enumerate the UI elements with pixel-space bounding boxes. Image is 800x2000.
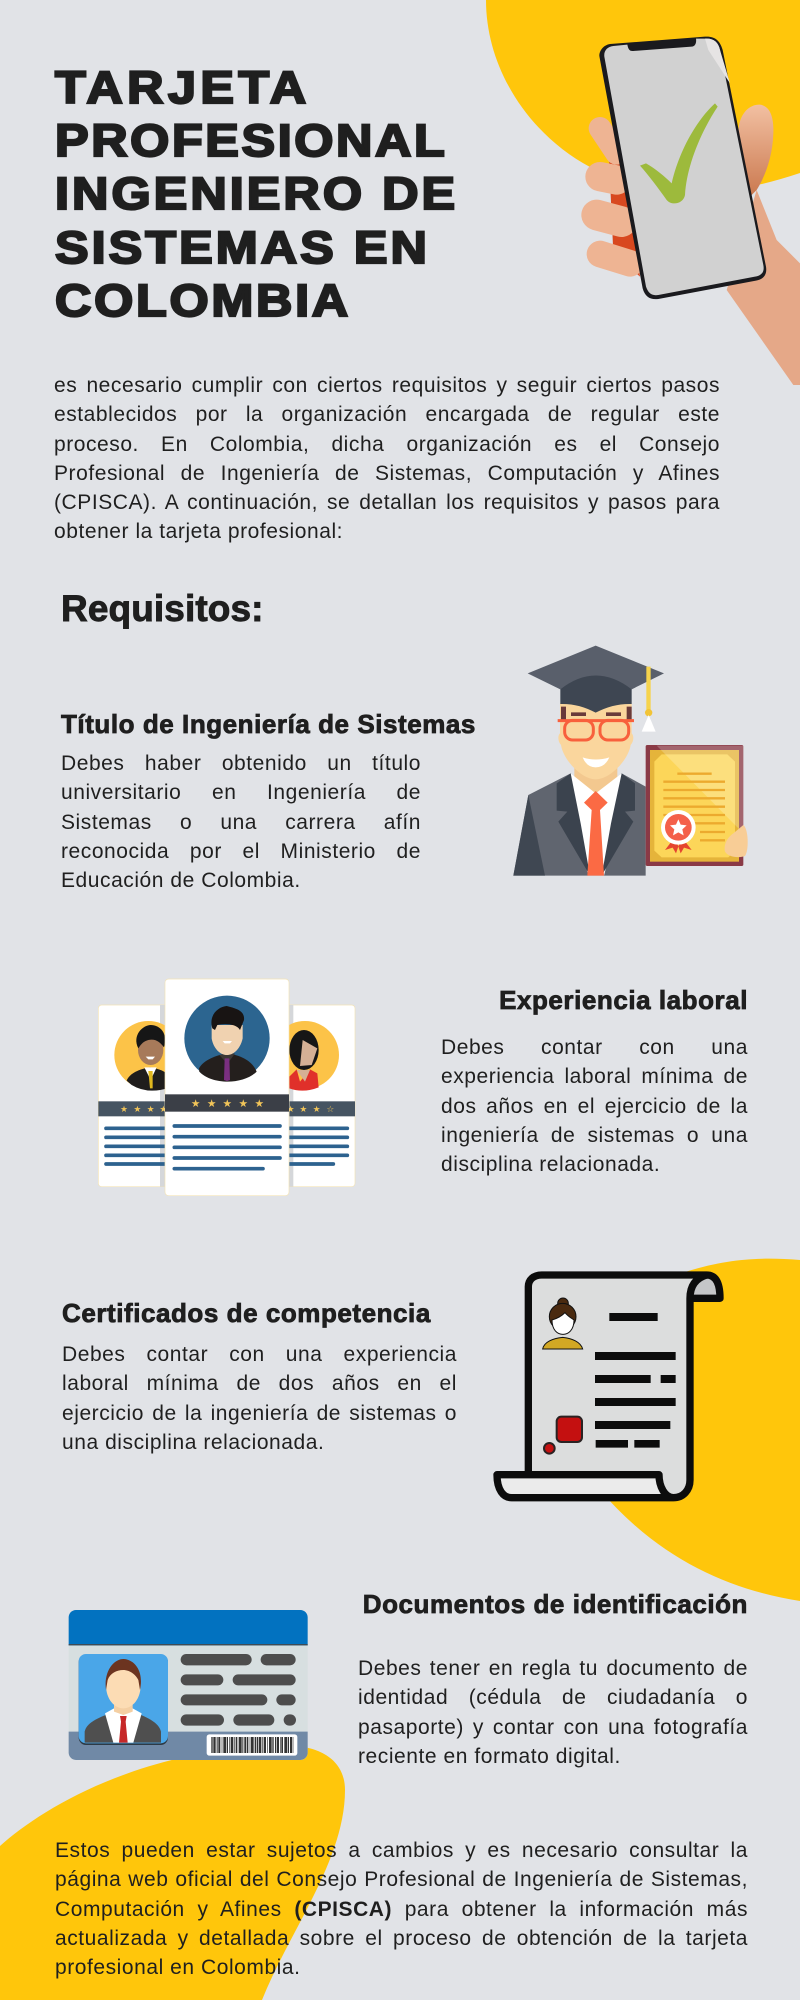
intro paragraph [54, 374, 720, 543]
icon: three profile cards [98, 979, 355, 1196]
text: experiencia laboral: ingeniería de sistemas o una [441, 1124, 748, 1147]
text: título de ingeniería [61, 752, 421, 892]
title: COLOMBIA [55, 275, 351, 326]
closing paragraph: página web oficial del Consejo Profesional de Ingeniería de Sistemas, [55, 1868, 748, 1891]
text: título de ingeniería: Debes haber obtenido un título [61, 752, 421, 775]
heading: título de ingeniería: Título de Ingeniería de Sistemas [61, 709, 476, 739]
icon: identification card [69, 1610, 308, 1760]
closing paragraph: actualizada y detallada sobre el proceso de obtención de la tarjeta [55, 1927, 748, 1950]
blob: middle right [582, 1259, 800, 1601]
text: título de ingeniería: Sistemas o una carrera afín [61, 811, 421, 834]
icon: three profile cards: ★ [287, 1105, 295, 1115]
intro paragraph: proceso. En Colombia, dicha organización es el Consejo [54, 433, 720, 456]
icon: three profile cards: ☆ [326, 1105, 334, 1115]
title: SISTEMAS EN [55, 222, 430, 273]
text: certificados de competencia: ejercicio de la ingeniería de sistemas o [62, 1402, 457, 1425]
icon: hand holding phone with check mark [597, 37, 800, 385]
closing paragraph: Estos pueden estar sujetos a cambios y es necesario consultar la [55, 1839, 748, 1862]
intro paragraph: Profesional de Ingeniería de Sistemas, Computación y Afines [54, 462, 720, 485]
text: experiencia laboral: Debes contar con una [441, 1036, 748, 1059]
text: documentos de identificación: identidad (cédula de ciudadanía o [358, 1686, 748, 1709]
heading: requisitos: Requisitos: [61, 588, 264, 629]
text: título de ingeniería: reconocida por el Ministerio de [61, 840, 421, 863]
text: título de ingeniería: Educación de Colombia. [61, 869, 301, 892]
text: documentos de identificación [358, 1657, 748, 1768]
text: certificados de competencia: laboral mínima de dos años en el [62, 1372, 457, 1395]
title [54, 62, 458, 326]
text: documentos de identificación: reciente en formato digital. [358, 1745, 621, 1768]
text: documentos de identificación: Debes tener en regla tu documento de [358, 1657, 748, 1680]
title: PROFESIONAL [55, 115, 447, 166]
heading: documentos de identificación: Documentos de identificación [363, 1589, 748, 1619]
icon: three profile cards: ★ [159, 1105, 167, 1115]
intro paragraph: es necesario cumplir con ciertos requisitos y seguir ciertos pasos [54, 374, 720, 397]
icon: three profile cards: ★ [147, 1105, 155, 1115]
text: título de ingeniería: universitario en Ingeniería de [61, 781, 421, 804]
icon: three profile cards: ★ [191, 1097, 200, 1110]
text: certificados de competencia [62, 1343, 457, 1454]
icon: three profile cards: ★ [133, 1105, 141, 1115]
icon: three profile cards: ★ [313, 1105, 321, 1115]
icon: graduate holding diploma [513, 646, 748, 876]
closing paragraph: profesional en Colombia. [55, 1956, 301, 1979]
text: experiencia laboral: disciplina relacionada. [441, 1153, 660, 1176]
heading: experiencia laboral: Experiencia laboral [499, 985, 748, 1015]
icon: three profile cards: ★ [239, 1097, 248, 1110]
intro paragraph: obtener la tarjeta profesional: [54, 520, 343, 543]
intro paragraph: (CPISCA). A continuación, se detallan los requisitos y pasos para [54, 491, 720, 514]
icon: three profile cards: ★ [207, 1097, 216, 1110]
title: INGENIERO DE [55, 168, 458, 219]
icon: three profile cards: ★ [299, 1105, 307, 1115]
icon: three profile cards: ★ [223, 1097, 232, 1110]
text: certificados de competencia: una disciplina relacionada. [62, 1431, 324, 1454]
closing paragraph: Computación y Afines (CPISCA) para obtener la información más [55, 1898, 748, 1921]
text: documentos de identificación: pasaporte) y contar con una fotografía [358, 1716, 748, 1739]
blob: bottom left [0, 1745, 345, 2000]
text: experiencia laboral: dos años en el ejercicio de la [441, 1095, 748, 1118]
icon: three profile cards: ★ [120, 1105, 128, 1115]
icon: three profile cards: ★ [255, 1097, 264, 1110]
text: experiencia laboral [441, 1036, 748, 1176]
icon: certificate scroll document [497, 1275, 720, 1498]
text: experiencia laboral: experiencia laboral mínima de [441, 1065, 748, 1088]
blob: top right [486, 0, 800, 193]
heading: certificados de competencia: Certificados de competencia [62, 1298, 431, 1328]
intro paragraph: establecidos por la organización encargada de regular este [54, 403, 720, 426]
text: certificados de competencia: Debes contar con una experiencia [62, 1343, 457, 1366]
closing paragraph [55, 1839, 748, 1979]
title: TARJETA [55, 62, 311, 113]
